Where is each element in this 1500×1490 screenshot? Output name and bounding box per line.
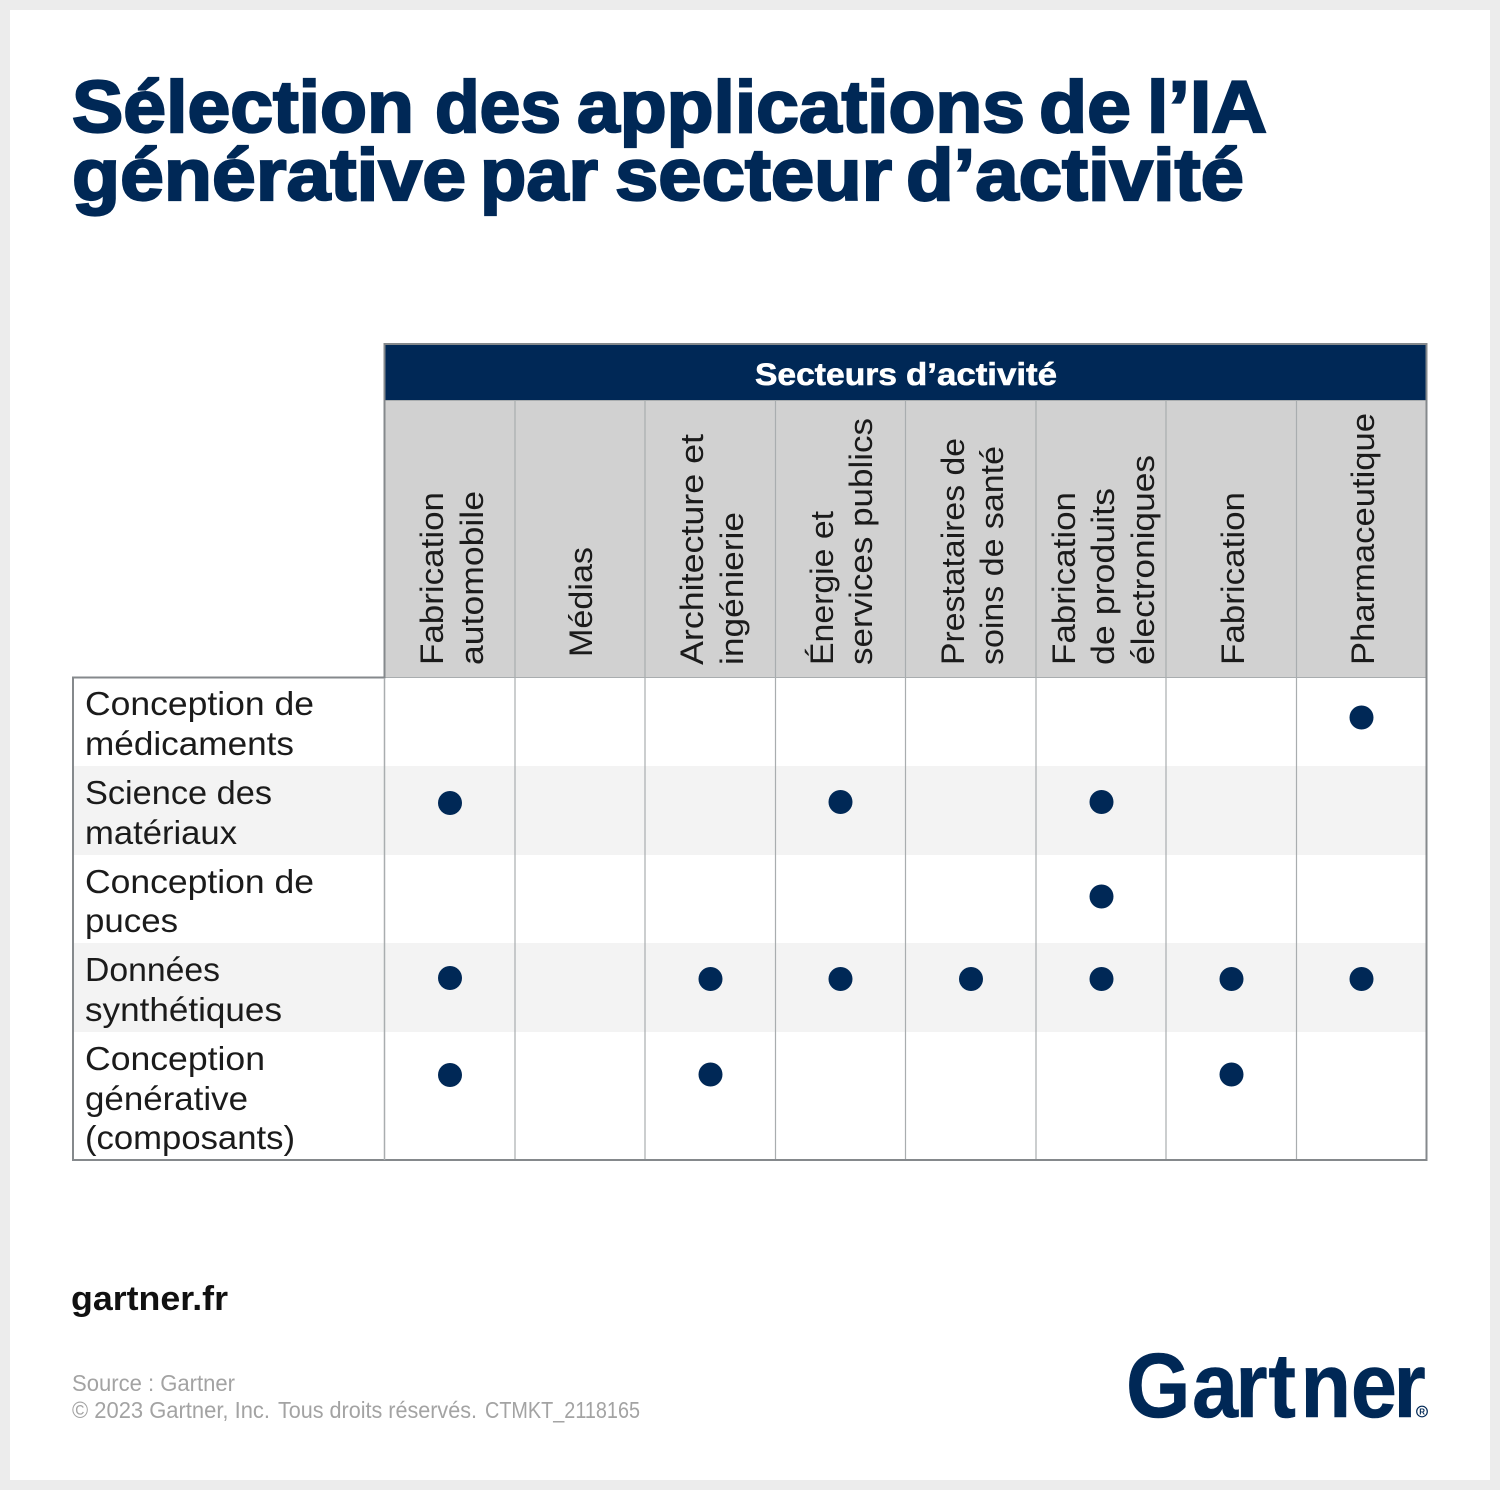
website: gartner.fr bbox=[71, 1280, 228, 1318]
column labels: ingénierie bbox=[714, 512, 750, 665]
column labels: Médias bbox=[563, 547, 599, 657]
column labels: services publics bbox=[843, 418, 879, 665]
dots bbox=[438, 706, 1374, 1087]
Gartner logo: Gartner bbox=[1126, 1334, 1426, 1437]
heading band: Secteurs d'activité bbox=[385, 345, 1426, 400]
column labels bbox=[414, 413, 1381, 665]
row stripes bbox=[73, 766, 1426, 1032]
column labels: Fabrication bbox=[414, 492, 450, 665]
row labels: Conception bbox=[85, 1040, 265, 1077]
column labels: Fabrication bbox=[1046, 492, 1082, 665]
column labels: Prestataires de bbox=[935, 438, 971, 665]
Gartner logo: R bbox=[1419, 1408, 1425, 1416]
title: d’activité bbox=[906, 135, 1244, 216]
title: générative bbox=[72, 135, 466, 216]
title: applications bbox=[577, 67, 1025, 148]
row labels: Science des bbox=[85, 774, 272, 811]
row labels: (composants) bbox=[85, 1119, 295, 1156]
heading band: Secteurs d'activité: d’activité bbox=[906, 356, 1057, 392]
source note: CTMKT_2118165 bbox=[485, 1397, 640, 1423]
row labels: Conception de bbox=[85, 685, 314, 722]
source note: Source : Gartner bbox=[72, 1370, 235, 1396]
title: par bbox=[480, 135, 598, 216]
row labels: matériaux bbox=[85, 814, 238, 851]
source note: © 2023 Gartner, Inc. bbox=[72, 1397, 270, 1423]
source note: Tous droits réservés. bbox=[278, 1397, 477, 1423]
column labels: Pharmaceutique bbox=[1345, 413, 1381, 665]
source note bbox=[72, 1370, 640, 1423]
row labels: Données bbox=[85, 951, 220, 988]
title bbox=[72, 67, 1267, 216]
row labels: Conception de bbox=[85, 863, 314, 900]
column header background bbox=[385, 400, 1426, 678]
column labels: Fabrication bbox=[1215, 492, 1251, 665]
column labels: Architecture et bbox=[674, 434, 710, 665]
column labels: de produits bbox=[1085, 488, 1121, 665]
column labels: Énergie et bbox=[804, 511, 840, 665]
heading band: Secteurs d'activité: Secteurs bbox=[755, 356, 897, 392]
grid lines bbox=[385, 400, 1426, 1160]
column labels: automobile bbox=[454, 491, 490, 665]
row labels: générative bbox=[85, 1080, 248, 1117]
title: secteur bbox=[615, 135, 892, 216]
column labels: soins de santé bbox=[974, 446, 1010, 665]
title: l’IA bbox=[1147, 67, 1267, 148]
row labels bbox=[85, 685, 314, 1156]
title: des bbox=[435, 67, 561, 148]
title: Sélection bbox=[72, 67, 414, 148]
row labels: médicaments bbox=[85, 725, 294, 762]
table outline bbox=[73, 344, 1426, 1160]
title: de bbox=[1039, 67, 1131, 148]
row labels: puces bbox=[85, 902, 178, 939]
table bbox=[73, 344, 1426, 1160]
row labels: synthétiques bbox=[85, 991, 282, 1028]
column labels: électroniques bbox=[1125, 455, 1161, 665]
